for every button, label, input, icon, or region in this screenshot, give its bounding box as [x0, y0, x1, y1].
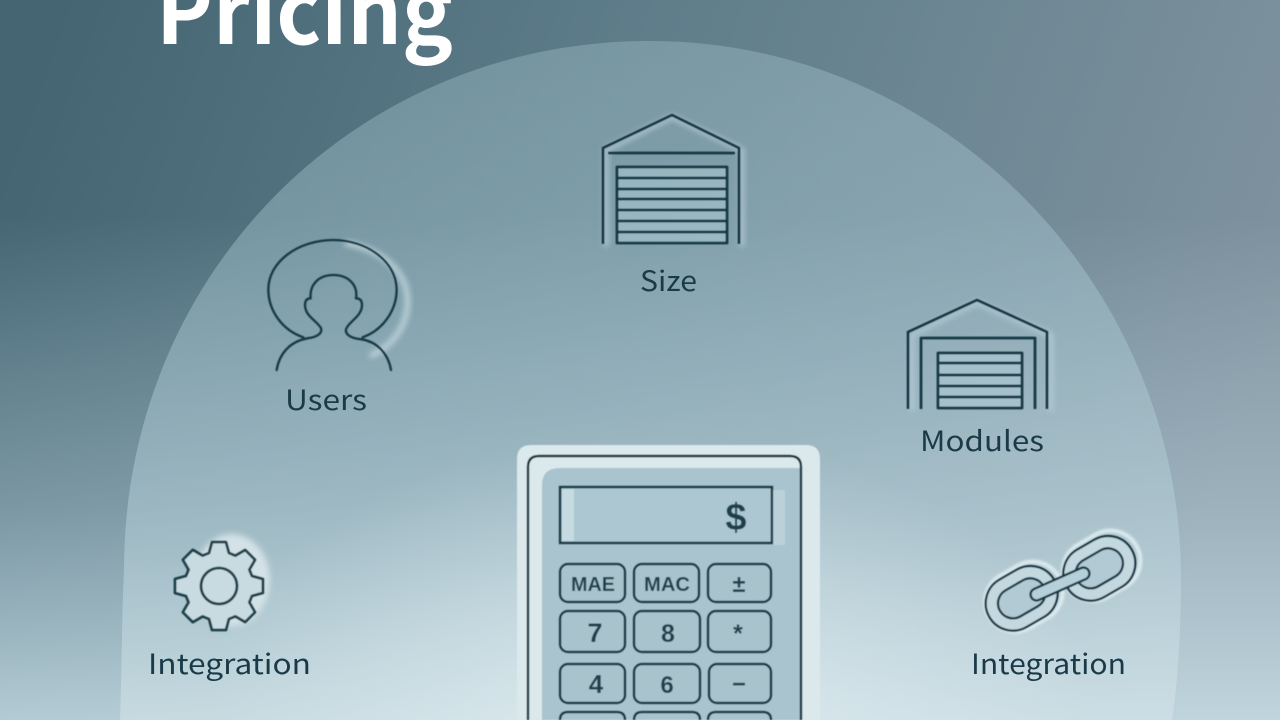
icon: users	[268, 240, 408, 370]
label: users: Users	[285, 379, 367, 419]
calculator body	[517, 445, 820, 720]
icon: chain link	[974, 520, 1151, 643]
label: integration left: Integration	[148, 643, 311, 683]
icon: size garage	[603, 115, 742, 246]
calculator keys: −	[732, 671, 746, 698]
calculator display: $	[725, 497, 747, 539]
calculator keys: *	[733, 620, 743, 648]
calculator keys: 7	[587, 618, 603, 648]
calculator keys: MAC	[644, 574, 690, 596]
icon: gear	[175, 534, 270, 630]
calculator keys: ±	[732, 571, 746, 598]
calculator display	[560, 487, 785, 545]
label: integration right: Integration	[971, 643, 1126, 683]
panel: large circle	[120, 41, 1181, 720]
label: size: Size	[640, 260, 697, 300]
calculator keys: MAE	[571, 574, 615, 596]
calculator keys: 8	[661, 620, 675, 648]
calculator keys: 4	[589, 669, 604, 699]
calculator	[517, 445, 820, 720]
calculator keys	[560, 564, 771, 720]
label: modules: Modules	[920, 420, 1044, 460]
icon: modules garage	[908, 300, 1051, 411]
calculator keys: 6	[660, 672, 674, 699]
